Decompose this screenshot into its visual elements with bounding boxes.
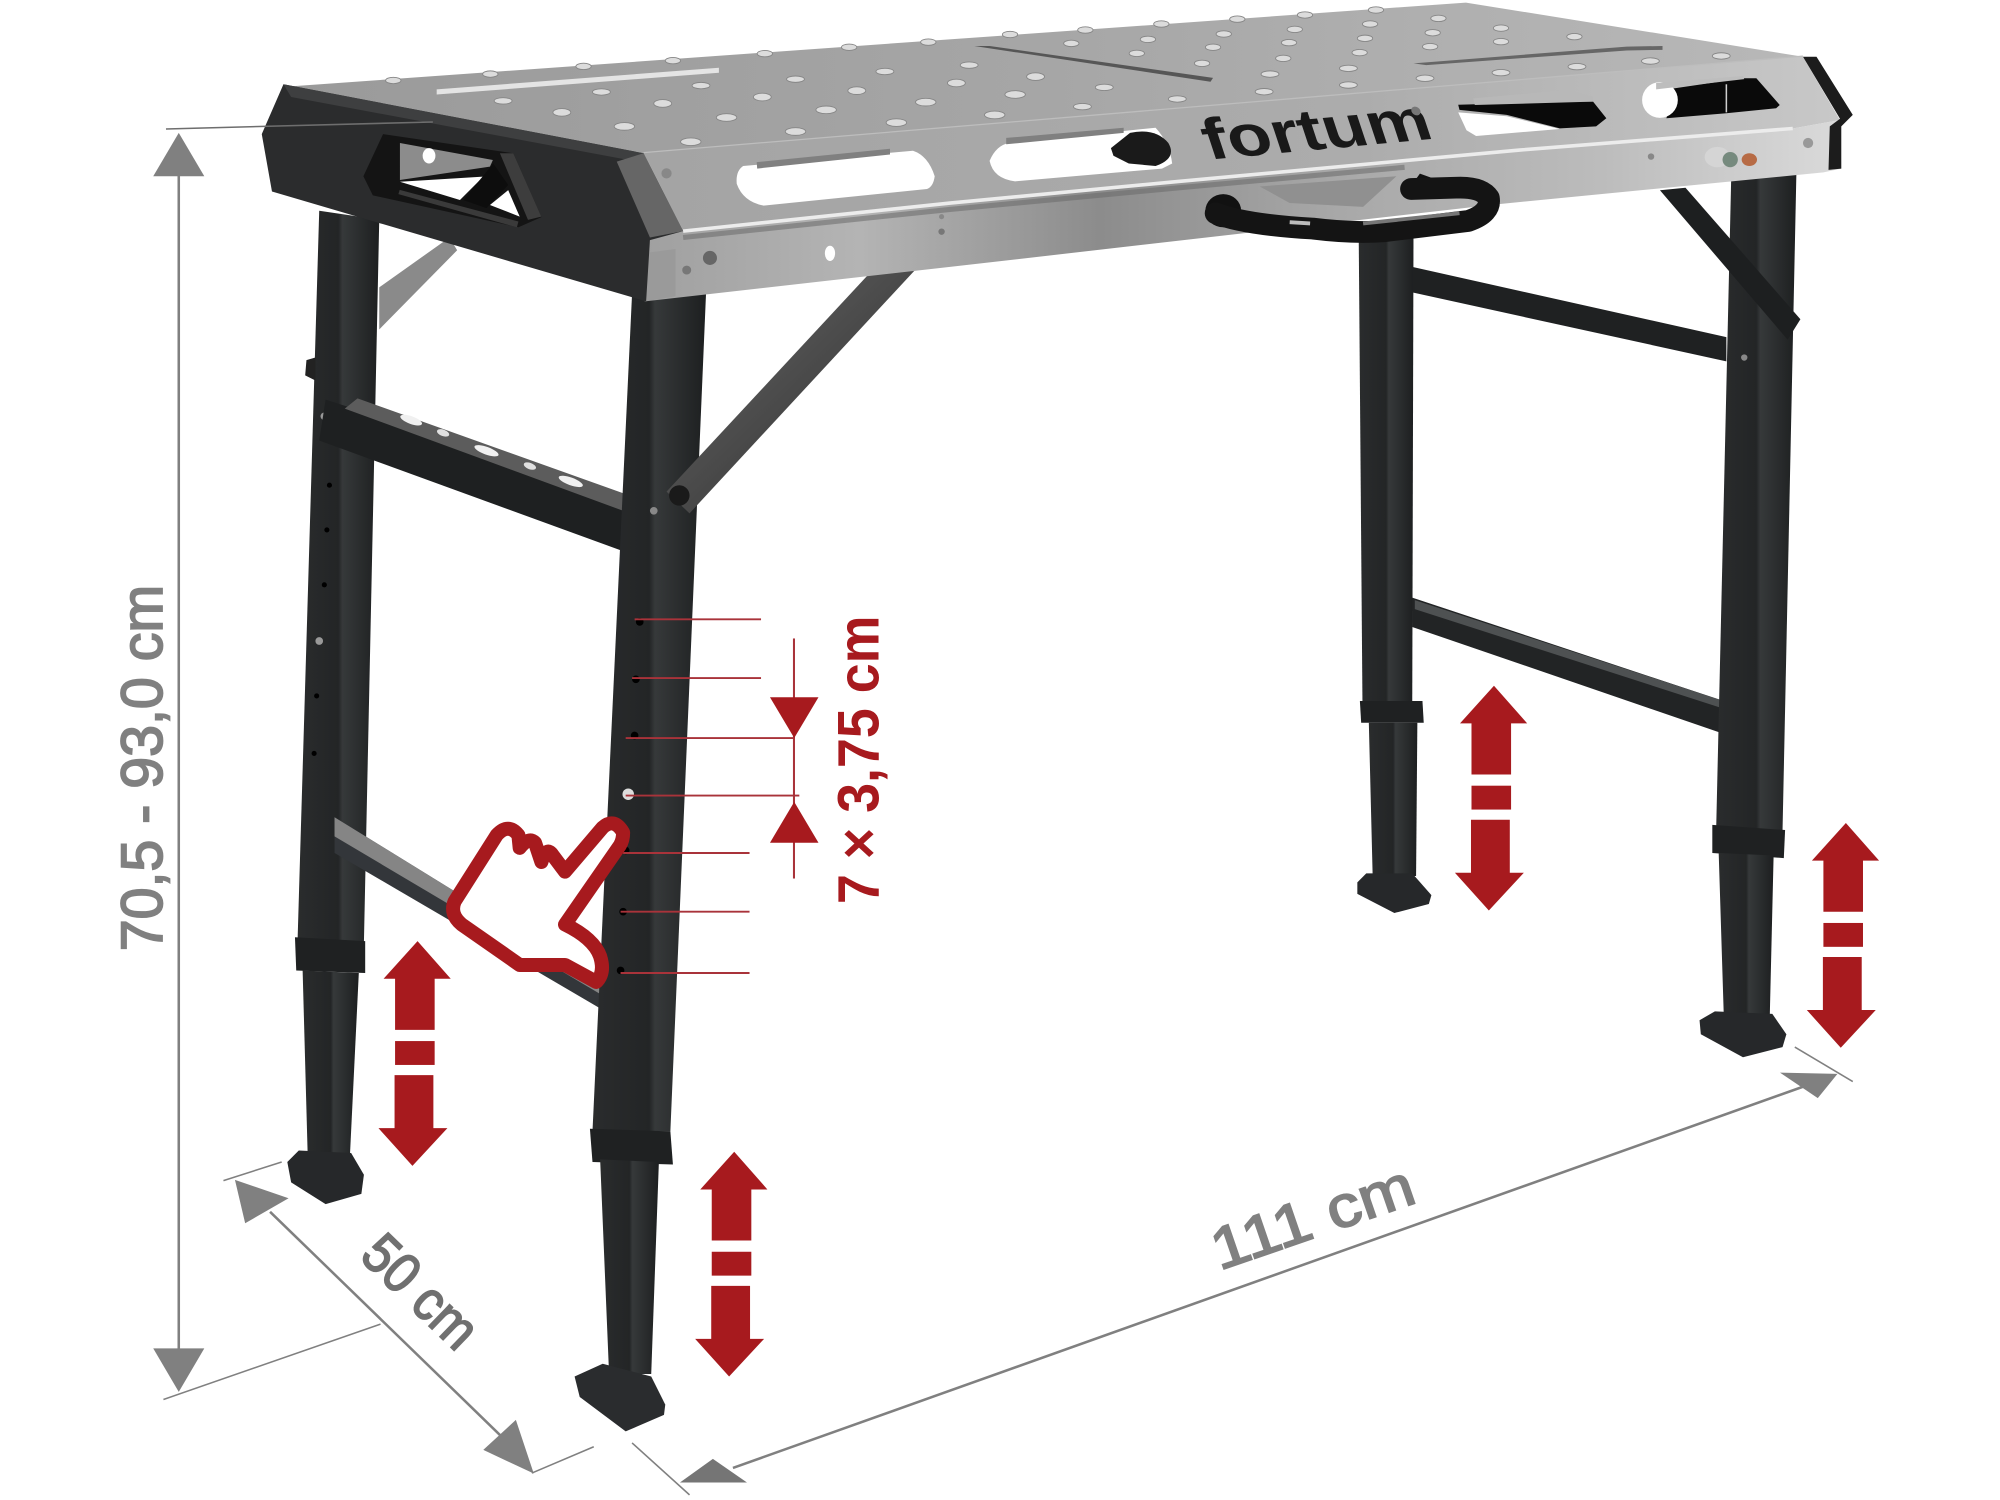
- carry handle: [1205, 174, 1489, 232]
- height label: 70,5 - 93,0 cm: [110, 585, 175, 951]
- width label: 111 cm: [1203, 1153, 1423, 1283]
- back-left diagonal brace: [379, 238, 457, 329]
- left upper crossbar with slots: [319, 398, 645, 557]
- red height-adjust arrow: front-right foot: [1807, 823, 1879, 1048]
- back-left leg: [287, 211, 379, 1204]
- depth label: 50 cm: [350, 1221, 492, 1361]
- right crossbars: [1412, 267, 1726, 733]
- front-left diagonal brace: [667, 269, 916, 513]
- right diagonal brace: [1660, 188, 1800, 340]
- logo: fortum: [1192, 87, 1440, 172]
- end-cap handle opening: [363, 134, 541, 227]
- table top slots: [437, 46, 1663, 95]
- front-left leg: [575, 291, 706, 1431]
- left end black cap: [262, 84, 683, 301]
- table top holes: [386, 7, 1730, 146]
- front-right leg: [1700, 163, 1797, 1057]
- right end black cap: [1803, 57, 1853, 170]
- lower steel band: [645, 120, 1841, 301]
- left lower crossbar: [335, 817, 608, 1011]
- hole spacing lines: [621, 619, 799, 973]
- sloped front panel: [644, 57, 1840, 231]
- oblong cutouts: [737, 76, 1780, 206]
- back-right leg: [1357, 223, 1431, 913]
- width dimension: [632, 1047, 1853, 1495]
- depth dimension: [223, 1162, 594, 1474]
- icon: pointing hand: [453, 823, 623, 982]
- height dimension: [110, 122, 433, 1399]
- table top surface: [283, 3, 1803, 153]
- red height-adjust arrow: back-right foot: [1455, 686, 1527, 910]
- spacing dimension arrows: [770, 638, 818, 879]
- spacing label: 7 × 3,75 cm: [827, 615, 892, 904]
- red height-adjust arrow: front-left foot: [695, 1152, 767, 1377]
- red height-adjust arrow: back-left foot: [378, 941, 451, 1166]
- knob: [1111, 132, 1171, 166]
